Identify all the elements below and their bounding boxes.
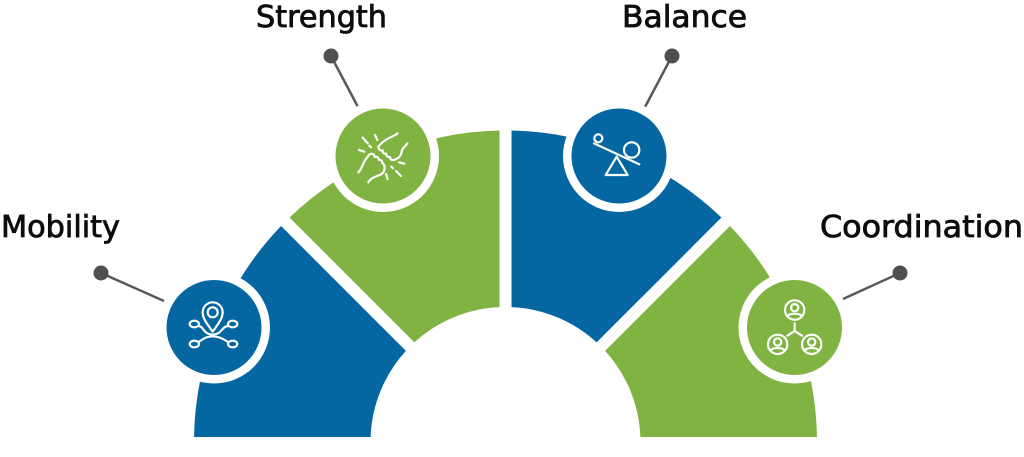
pointer: Coordination	[843, 266, 908, 299]
icon: location pin network	[190, 302, 237, 347]
badge: Mobility	[158, 272, 270, 384]
segment: balance	[512, 131, 721, 342]
label: Strength: Strength	[256, 0, 387, 35]
badge: Balance	[563, 100, 675, 212]
label: Mobility: Mobility	[1, 210, 120, 245]
segment: coordination	[605, 226, 817, 437]
icon: fist bump	[358, 133, 407, 182]
badge: Coordination	[738, 272, 850, 384]
pointer: Mobility	[94, 266, 164, 301]
pointer: Strength	[324, 48, 358, 107]
segment: strength	[290, 131, 500, 342]
icon: connected people	[768, 300, 821, 354]
label: Coordination: Coordination	[820, 210, 1023, 245]
pointer: Balance	[645, 48, 680, 107]
segment: mobility	[194, 226, 406, 437]
badge: Strength	[327, 100, 439, 212]
label: Balance: Balance	[622, 0, 747, 35]
icon: seesaw	[594, 134, 639, 175]
